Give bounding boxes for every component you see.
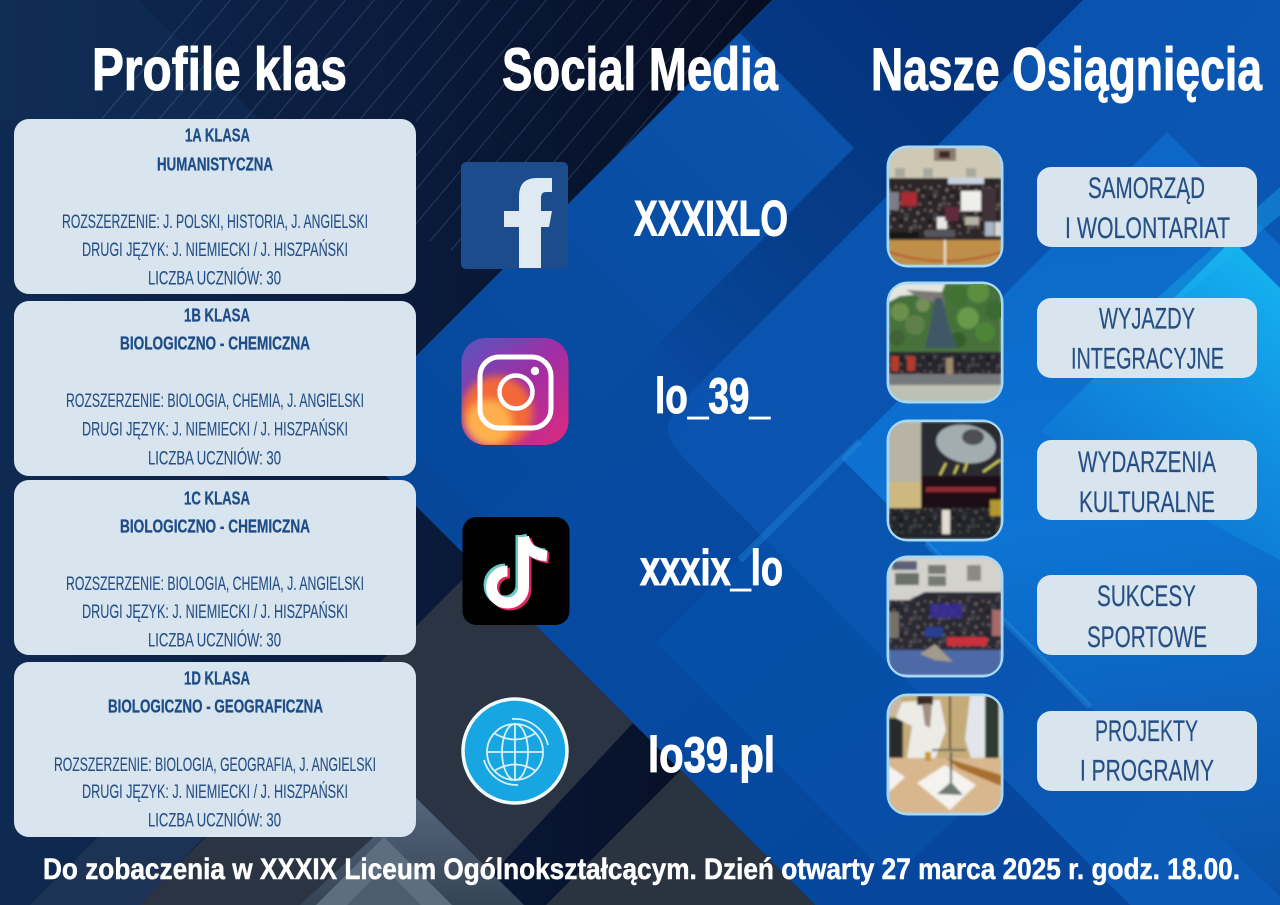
label: Projekty i programy [1037, 711, 1257, 791]
panel: 1D klasa: DRUGI JĘZYK: J. NIEMIECKI / J. HISZPAŃSKI [82, 780, 348, 803]
photo: group by monument in park [886, 281, 1005, 404]
panel: 1D klasa: 1D KLASA [184, 668, 250, 688]
label: XXXIXLO: XXXIXLO [634, 190, 788, 246]
photo: sports teams in hall [886, 556, 1004, 678]
label: Wydarzenia kulturalne: WYDARZENIA [1078, 446, 1216, 479]
label: lo39.pl: lo39.pl [648, 727, 775, 783]
panel: 1C klasa [14, 480, 416, 655]
label: Samorząd i wolontariat: SAMORZĄD [1088, 172, 1205, 205]
panel: 1B klasa: LICZBA UCZNIÓW: 30 [148, 446, 281, 470]
panel: 1C klasa: BIOLOGICZNO - CHEMICZNA [120, 516, 310, 536]
label: Projekty i programy: PROJEKTY [1095, 715, 1198, 748]
panel: 1B klasa: DRUGI JĘZYK: J. NIEMIECKI / J. HISZPAŃSKI [82, 418, 348, 440]
panel: 1B klasa: ROZSZERZENIE: BIOLOGIA, CHEMIA, J. ANGIELSKI [66, 390, 364, 412]
panel: 1A klasa: ROZSZERZENIE: J. POLSKI, HISTORIA, J. ANGIELSKI [62, 211, 368, 233]
label: Sukcesy sportowe [1037, 575, 1257, 655]
photo: cultural event at cinema [886, 420, 1004, 542]
heading: Profile klas: Profile klas [92, 36, 347, 103]
label: Wyjazdy integracyjne: WYJAZDY [1099, 302, 1195, 336]
label: Wydarzenia kulturalne: KULTURALNE [1079, 486, 1215, 519]
heading: Social Media: Social Media [502, 36, 778, 103]
label: lo_39_: lo_39_ [655, 368, 771, 424]
panel: 1B klasa: BIOLOGICZNO - CHEMICZNA [120, 334, 310, 354]
label: Wyjazdy integracyjne [1037, 298, 1257, 378]
panel: 1A klasa: HUMANISTYCZNA [157, 154, 273, 174]
panel: 1C klasa: LICZBA UCZNIÓW: 30 [148, 628, 281, 652]
label: Wydarzenia kulturalne [1037, 440, 1257, 520]
label: xxxix_lo: xxxix_lo [640, 540, 783, 596]
label: Sukcesy sportowe: SPORTOWE [1087, 621, 1207, 654]
panel: 1D klasa: BIOLOGICZNO - GEOGRAFICZNA [108, 696, 323, 716]
panel: 1D klasa: LICZBA UCZNIÓW: 30 [148, 808, 281, 832]
panel: 1A klasa: LICZBA UCZNIÓW: 30 [148, 266, 281, 290]
icon: website globe [463, 699, 567, 803]
label: Samorząd i wolontariat [1037, 167, 1257, 247]
panel: 1C klasa: DRUGI JĘZYK: J. NIEMIECKI / J. HISZPAŃSKI [82, 600, 348, 623]
icon: Facebook [461, 162, 568, 269]
panel: 1C klasa: ROZSZERZENIE: BIOLOGIA, CHEMIA, J. ANGIELSKI [66, 573, 364, 595]
panel: 1A klasa: DRUGI JĘZYK: J. NIEMIECKI / J. HISZPAŃSKI [82, 238, 348, 261]
panel: 1D klasa [14, 662, 416, 837]
photo: student council group in gym [886, 146, 1004, 268]
panel: 1A klasa: 1A KLASA [185, 126, 250, 146]
icon: TikTok [462, 517, 570, 625]
panel: 1D klasa: ROZSZERZENIE: BIOLOGIA, GEOGRAFIA, J. ANGIELSKI [54, 754, 376, 776]
photo: science experiment [886, 694, 1004, 816]
label: Sukcesy sportowe: SUKCESY [1097, 580, 1196, 613]
label: Projekty i programy: I PROGRAMY [1080, 754, 1214, 788]
panel: 1B klasa [14, 301, 416, 476]
icon: Instagram [461, 338, 568, 448]
panel: 1C klasa: 1C KLASA [184, 488, 250, 508]
panel: 1B klasa: 1B KLASA [184, 306, 250, 326]
panel: 1A klasa [14, 119, 416, 294]
